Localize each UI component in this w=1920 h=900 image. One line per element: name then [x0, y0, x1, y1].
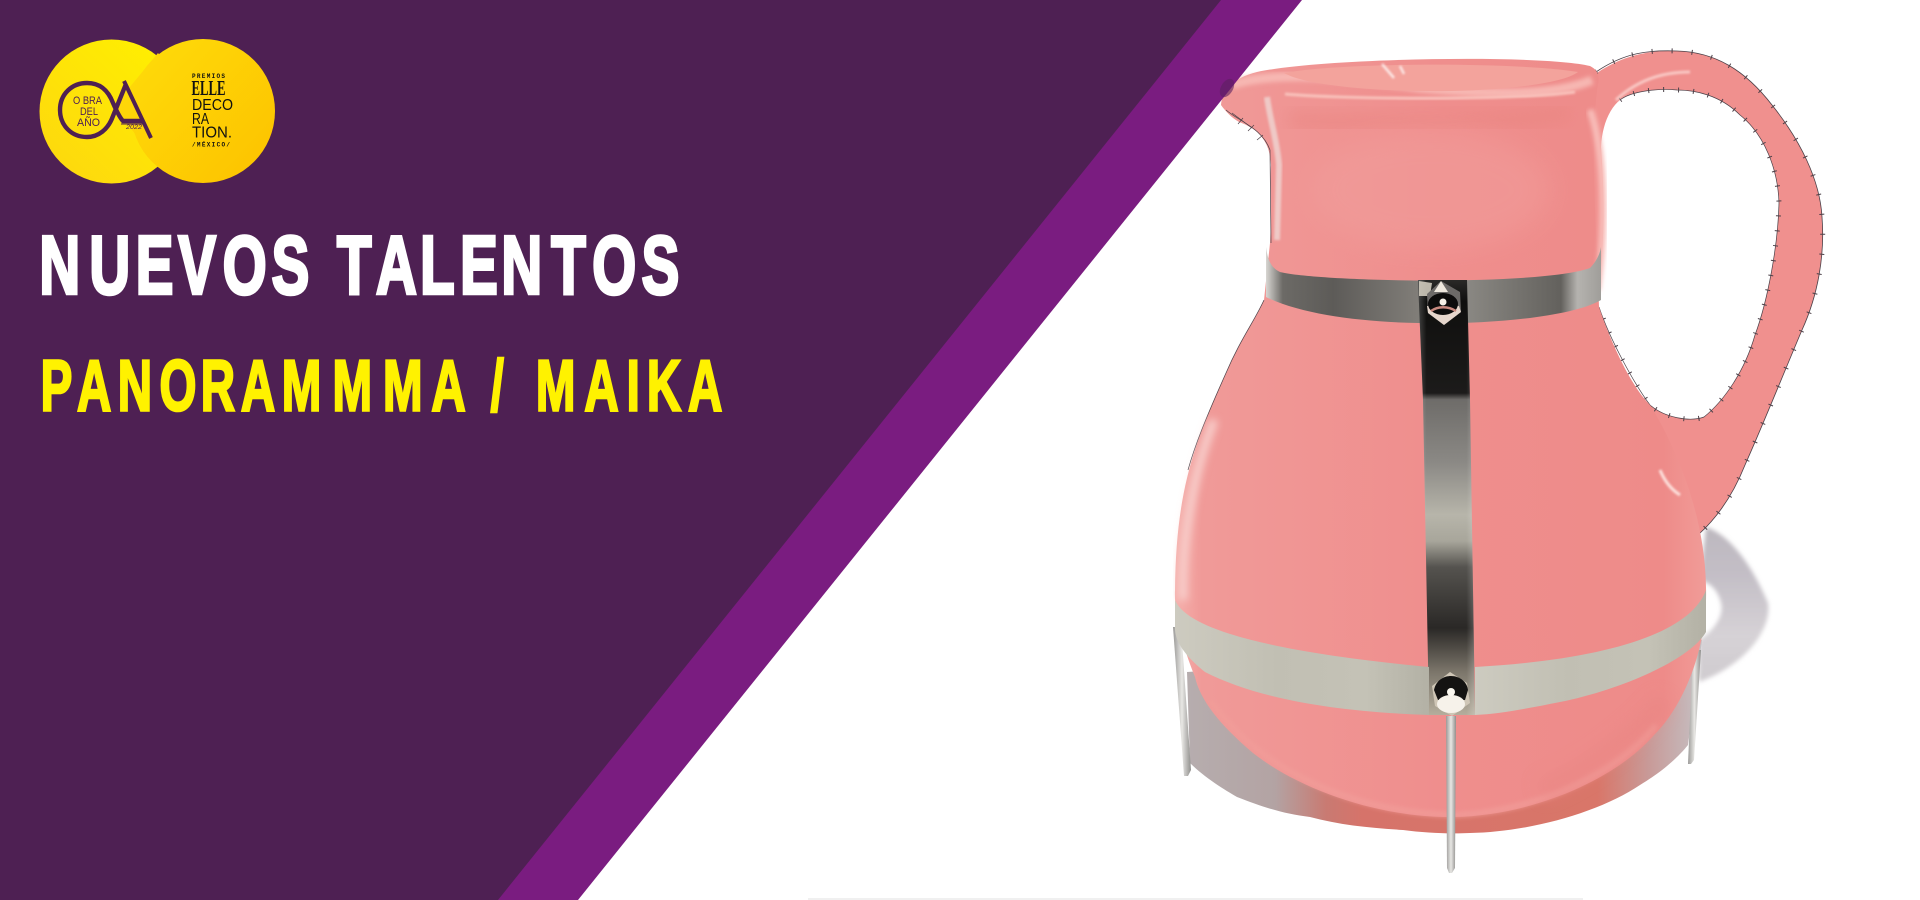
- bottom rivet: [1432, 672, 1470, 716]
- logo left circle: [40, 40, 184, 184]
- Premios Elle Decoration wordmark: [192, 73, 233, 148]
- Premios Elle Decoration wordmark: ELLE: [192, 76, 226, 100]
- logo: Obra del Año / Premios Elle Decoration: [40, 39, 275, 184]
- centre foot: [1446, 716, 1456, 873]
- panel: dark purple diagonal: [0, 0, 1221, 900]
- floor shadow: [1187, 640, 1702, 833]
- Obra del Año wordmark: AÑO: [77, 116, 100, 129]
- body highlights: [1183, 72, 1690, 815]
- Obra del Año wordmark: 2022: [125, 124, 142, 131]
- Premios Elle Decoration wordmark: RA: [192, 111, 209, 128]
- panel: purple diagonal stripe: [466, 0, 1302, 900]
- right foot: [1688, 650, 1701, 764]
- Premios Elle Decoration wordmark: TION.: [192, 124, 232, 142]
- handle stitches: [1596, 51, 1823, 534]
- top rivet: [1419, 281, 1461, 325]
- handle: [1580, 51, 1823, 534]
- photo: pink glass pitcher with metal bands: [1173, 51, 1823, 873]
- title: Nuevos Talentos: NUEVOS TALENTOS: [39, 220, 679, 312]
- Obra del Año wordmark: DEL: [80, 106, 98, 118]
- vertical metal strap: [1418, 280, 1475, 715]
- pitcher body: [1175, 59, 1706, 817]
- OA monogram: [60, 81, 151, 138]
- Premios Elle Decoration wordmark: /MÉXICO/: [192, 142, 230, 148]
- body outline stitches: [1188, 110, 1271, 470]
- left foot: [1173, 627, 1191, 776]
- Obra del Año wordmark: [73, 95, 142, 131]
- spout shadow on stripe: [1217, 76, 1237, 100]
- Obra del Año wordmark: O BRA: [73, 95, 103, 107]
- top metal band: [1266, 247, 1601, 323]
- pitcher mouth: [1284, 64, 1578, 98]
- Premios Elle Decoration wordmark: DECO: [192, 97, 233, 114]
- cast shadow of handle: [1699, 527, 1768, 682]
- subtitle: Panorammma / Maika: PANORAMMMA / MAIKA: [41, 345, 722, 426]
- Premios Elle Decoration wordmark: PREMIOS: [192, 73, 225, 80]
- logo right circle with chevron: [114, 39, 275, 183]
- bottom metal band: [1175, 600, 1429, 715]
